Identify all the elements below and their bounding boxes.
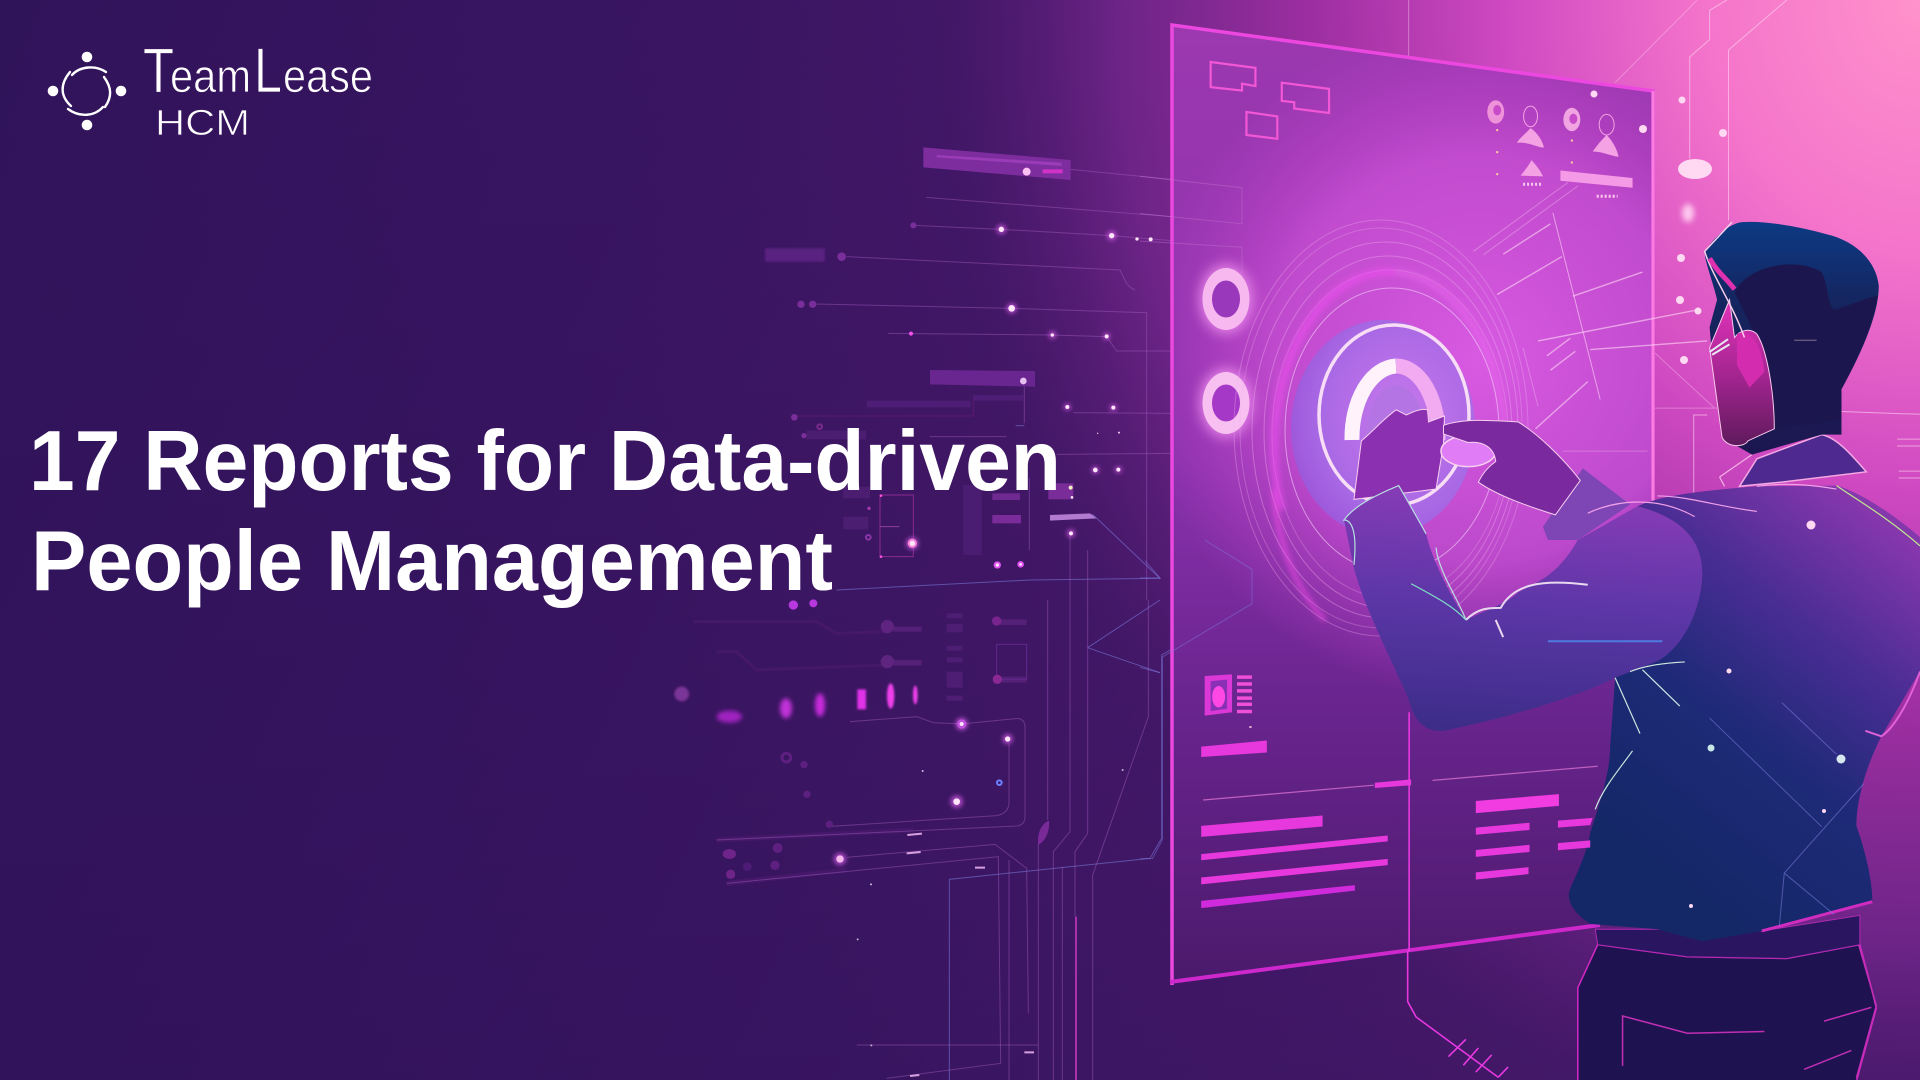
- title: People Management: [31, 514, 833, 609]
- header bar: [1201, 740, 1267, 757]
- text bars right: [1476, 794, 1593, 880]
- icon: logo circles: [48, 52, 126, 130]
- panel: holographic dashboard: [1170, 25, 1653, 985]
- gauge inner arc: [1352, 366, 1438, 495]
- sleeve and upper arm: [1344, 486, 1702, 731]
- lower HUD dots: [723, 599, 1124, 1046]
- icon: profile card: [1205, 674, 1252, 716]
- torso: [1569, 486, 1920, 941]
- belt: [1595, 915, 1860, 958]
- title: [29, 414, 1061, 609]
- icon: ring buttons: [1199, 264, 1253, 438]
- face: [1710, 300, 1774, 446]
- divider bars: [1203, 766, 1598, 800]
- dashboard lower contents: [1140, 540, 1598, 1077]
- chart: circular gauge: [1234, 220, 1528, 636]
- glasses: [1710, 339, 1730, 355]
- HUD top bar: [923, 147, 1071, 180]
- text bars left: [1201, 816, 1388, 908]
- HUD data lines upper: [765, 147, 1172, 600]
- logo: [48, 36, 373, 143]
- data rays: [1473, 183, 1707, 451]
- logo wordmark: L: [254, 36, 282, 106]
- logo wordmark: eam: [170, 50, 251, 102]
- neck and hair: [1705, 222, 1879, 455]
- particles: [1590, 90, 1846, 908]
- logo wordmark: HCM: [155, 102, 250, 143]
- faint panel circuit: [1140, 540, 1252, 859]
- logo wordmark: [143, 36, 373, 143]
- hair outline: [1705, 222, 1744, 338]
- sleeve highlights: [1344, 484, 1920, 926]
- title: 17 Reports for Data-driven: [29, 414, 1061, 509]
- small circuit frame: [866, 494, 913, 558]
- outlined tab shapes: [1211, 62, 1329, 139]
- logo wordmark: ease: [283, 50, 373, 102]
- blurred magenta bars: [674, 683, 918, 723]
- center connector line: [1408, 712, 1508, 1077]
- right forearm: [1543, 468, 1630, 540]
- HUD blocks: [765, 248, 1097, 555]
- people icons: [1487, 100, 1633, 196]
- pant highlights: [1623, 945, 1876, 1078]
- gauge white ring: [1319, 325, 1469, 505]
- dashboard upper contents: [1140, 62, 1707, 451]
- neck shadow: [1735, 264, 1878, 429]
- person: [1344, 222, 1920, 1080]
- HUD glowing dots: [791, 222, 1153, 569]
- pants: [1578, 945, 1876, 1080]
- collar: [1739, 435, 1866, 486]
- circuit lines right of panel: [1409, 0, 1920, 492]
- gauge inner disc: [1291, 320, 1475, 536]
- hands: [1354, 409, 1580, 515]
- leaf shape: [1038, 821, 1049, 845]
- thick faded traces: [693, 613, 1027, 883]
- ear: [1737, 333, 1764, 387]
- logo wordmark: T: [143, 36, 174, 106]
- HUD data lines lower: [674, 599, 1193, 1080]
